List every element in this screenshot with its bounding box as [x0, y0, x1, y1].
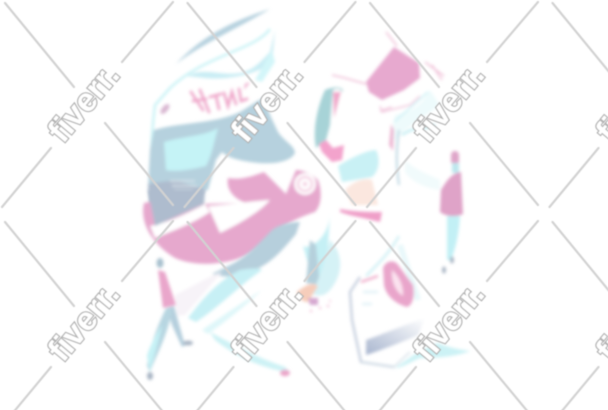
watermark: fiverr logos: fiverr.	[405, 56, 491, 149]
watermark: fiverr logos: fiverr.	[223, 275, 309, 368]
illustration: pink wave shape	[143, 170, 321, 264]
illustration: pink box at top	[332, 32, 444, 190]
watermark: fiverr logos: fiverr.	[40, 275, 126, 368]
watermark: fiverr logos: fiverr.	[40, 56, 126, 149]
illustration: walking person left	[147, 258, 193, 380]
illustration: center figure with phone	[297, 87, 382, 312]
illustration: large tablet with HTML label	[148, 9, 295, 224]
watermark: fiverr logos	[40, 56, 608, 368]
illustration: small bottom tablet	[350, 236, 470, 368]
illustration: standing person right	[440, 151, 463, 274]
white band	[150, 204, 210, 238]
icon: ring	[294, 173, 316, 195]
illustration: arm and swoosh	[175, 222, 300, 376]
watermark: fiverr logos: fiverr.	[405, 275, 491, 368]
label: HTML	[191, 82, 250, 112]
watermark: fiverr logos: fiverr.	[223, 56, 309, 149]
